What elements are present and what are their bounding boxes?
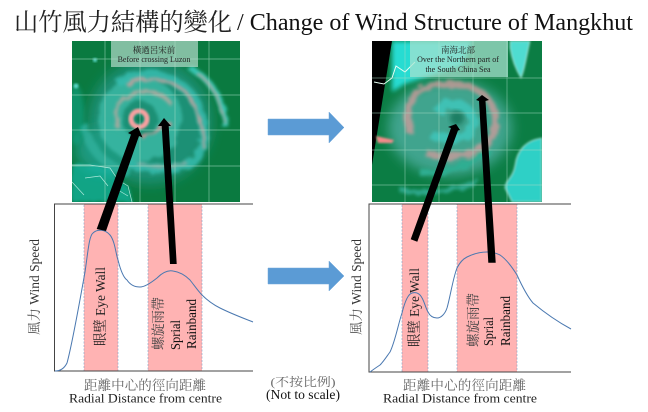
title bbox=[14, 8, 633, 36]
coastline, left bbox=[68, 58, 132, 202]
label: spiral rainband: Sprial bbox=[482, 317, 497, 346]
arrow: left rainband pointer bbox=[158, 118, 177, 264]
x-axis label: Radial Distance from centre bbox=[383, 392, 537, 406]
eye wall band bbox=[84, 204, 118, 371]
y-axis label: 風力 Wind Speed bbox=[26, 239, 42, 335]
chart: wind profile over South China Sea bbox=[348, 204, 571, 406]
note: not to scale bbox=[266, 374, 340, 402]
coastline, top left bbox=[374, 62, 415, 84]
caption box: before crossing Luzon: Before crossing Luzon bbox=[118, 55, 190, 64]
label: spiral rainband: Rainband bbox=[185, 299, 200, 349]
y-axis label: 風力 Wind Speed bbox=[348, 239, 364, 335]
x-axis label: Radial Distance from centre bbox=[69, 392, 222, 406]
label: spiral rainband: Sprial bbox=[169, 320, 184, 350]
label: eye wall: 眼壁 Eye Wall bbox=[407, 268, 423, 347]
label: spiral rainband: 螺旋雨帶 bbox=[150, 297, 166, 350]
wind speed curve bbox=[55, 230, 253, 371]
x-axis label bbox=[383, 377, 537, 406]
title: / Change of Wind Structure of Mangkhut bbox=[237, 10, 633, 36]
axes bbox=[54, 204, 253, 371]
arrow: right rainband pointer bbox=[476, 95, 496, 263]
land, upper bbox=[392, 41, 472, 92]
red streak bbox=[376, 136, 394, 143]
caption box: over South China Sea bbox=[410, 41, 508, 77]
caption box: over South China Sea: Over the Northern part of bbox=[417, 55, 499, 64]
label: spiral rainband: 螺旋雨帶 bbox=[465, 293, 481, 347]
note: not to scale: (不按比例) bbox=[270, 374, 336, 389]
wind speed curve bbox=[370, 252, 571, 372]
caption box: before crossing Luzon: 橫過呂宋前 bbox=[133, 45, 176, 55]
caption box: over South China Sea: the South China Sea bbox=[425, 65, 491, 74]
label: spiral rainband bbox=[150, 297, 200, 350]
rainband band bbox=[148, 204, 202, 371]
label: eye wall: 眼壁 Eye Wall bbox=[93, 267, 109, 346]
axes bbox=[369, 204, 571, 372]
land: Taiwan bbox=[510, 41, 530, 78]
panel: satellite image before crossing Luzon bbox=[68, 41, 240, 202]
arrow: lower blue transition bbox=[268, 261, 344, 291]
label: spiral rainband bbox=[465, 293, 514, 347]
arrow: left eye wall pointer bbox=[97, 127, 142, 231]
black no-data wedge bbox=[372, 41, 392, 165]
x-axis label bbox=[69, 377, 222, 406]
land: Luzon bbox=[505, 138, 542, 202]
x-axis label: 距離中心的徑向距離 bbox=[84, 377, 206, 393]
note: not to scale: (Not to scale) bbox=[266, 387, 340, 402]
lat/long grid, left bbox=[72, 41, 240, 202]
caption box: before crossing Luzon bbox=[111, 41, 198, 67]
title: 山竹風力結構的變化 bbox=[14, 8, 232, 36]
arrow: upper blue transition bbox=[268, 112, 344, 143]
eye wall band bbox=[402, 204, 428, 372]
eye bbox=[136, 116, 142, 122]
storm cloud spiral, left bbox=[75, 60, 226, 184]
panel: satellite image over South China Sea bbox=[372, 41, 542, 202]
arrow: right eye wall pointer bbox=[411, 124, 460, 242]
chart: wind profile before crossing Luzon bbox=[26, 204, 253, 406]
caption box: over South China Sea: 南海北部 bbox=[441, 45, 475, 55]
storm cloud spiral, right bbox=[388, 80, 512, 192]
lat/long grid, right bbox=[372, 41, 542, 202]
x-axis label: 距離中心的徑向距離 bbox=[403, 377, 526, 393]
eye ring bbox=[131, 111, 147, 127]
label: spiral rainband: Rainband bbox=[499, 296, 514, 346]
rainband band bbox=[457, 204, 517, 372]
